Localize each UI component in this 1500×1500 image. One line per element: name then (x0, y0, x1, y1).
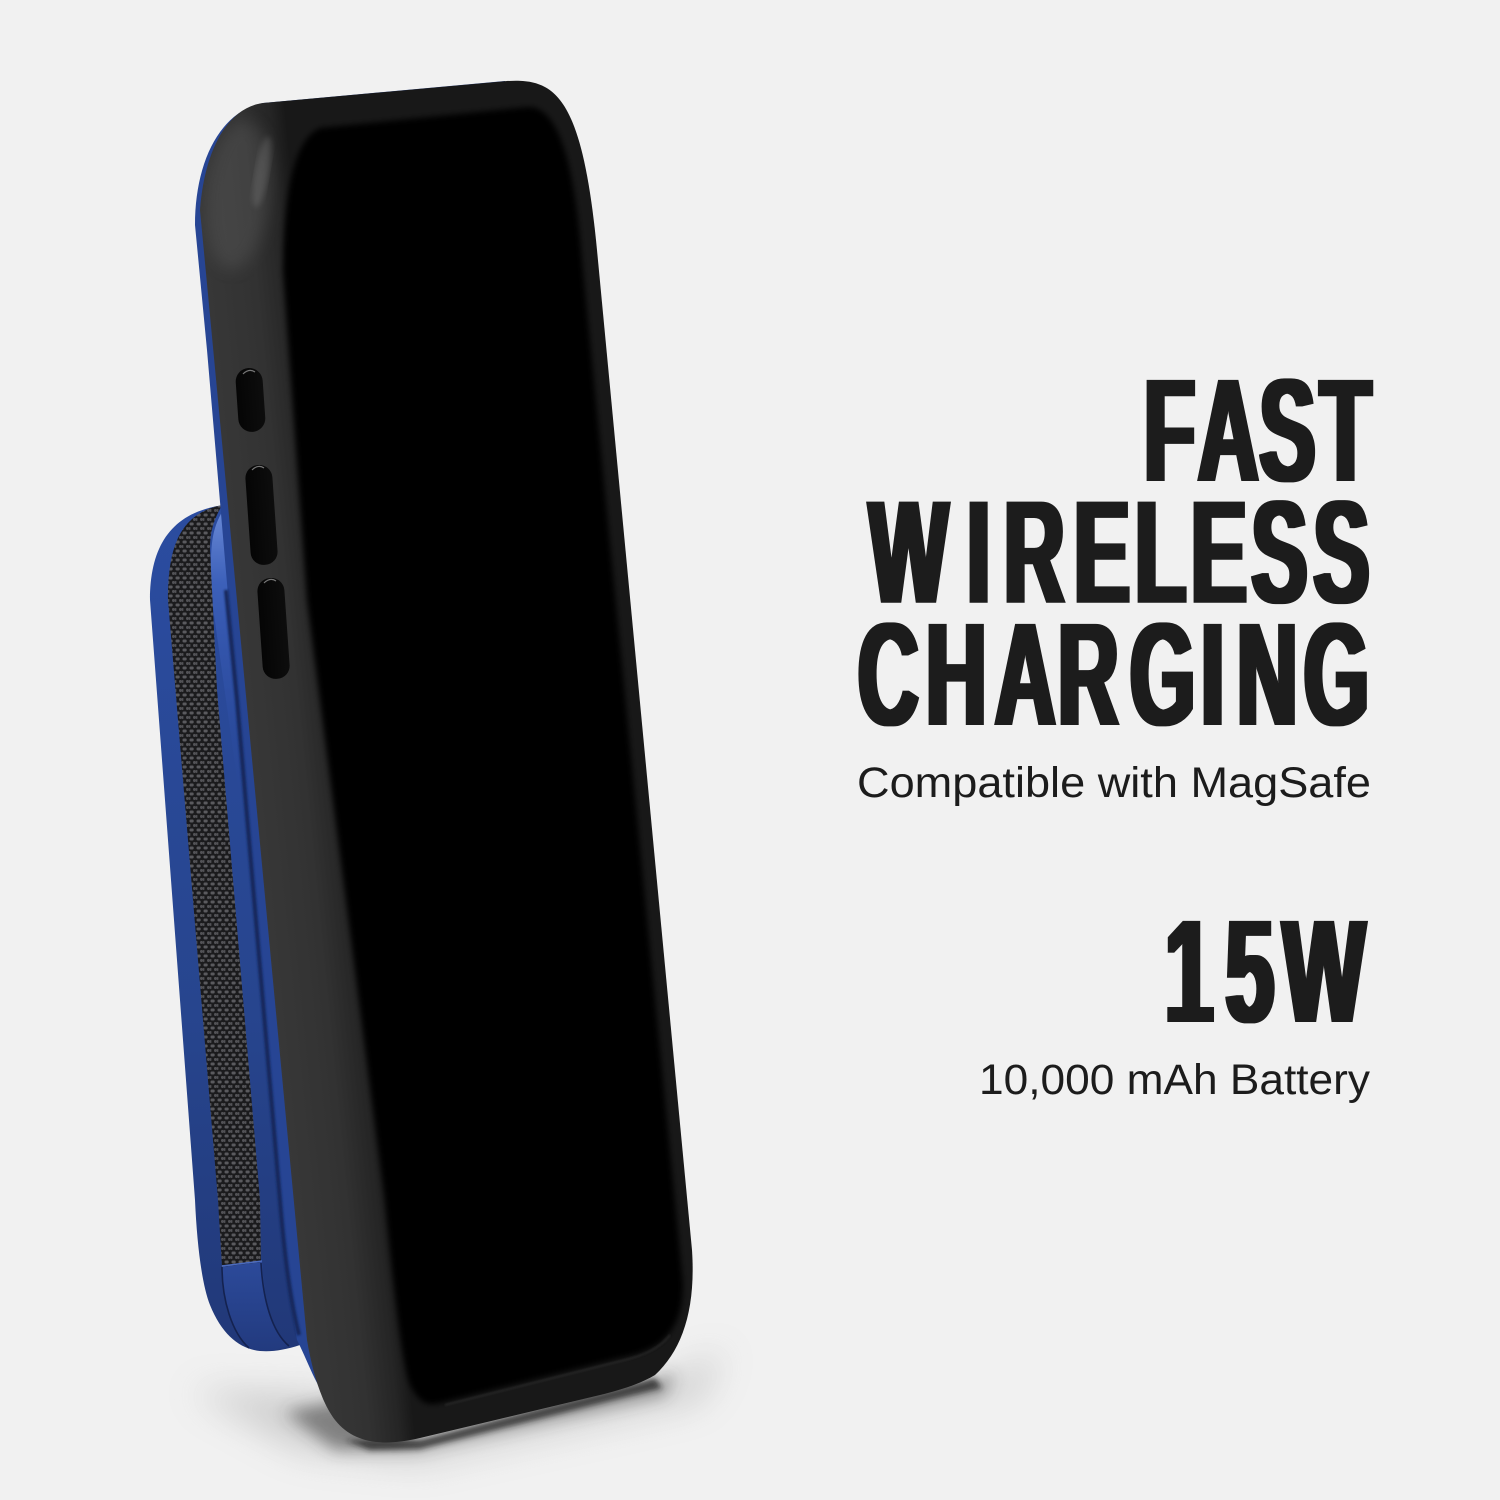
product: phone in case (195, 81, 693, 1442)
volume up button (245, 464, 278, 566)
heading: fast wireless charging (858, 350, 1371, 757)
phone screen (283, 107, 683, 1404)
screen edge glint (445, 1335, 670, 1405)
gap line between power bank and phone (226, 590, 299, 1335)
power bank fabric pad (168, 505, 261, 1267)
floor shadow (190, 1350, 725, 1462)
phone blue edge (195, 81, 520, 1410)
stat caption: battery capacity: 10,000 mAh Battery (979, 1056, 1371, 1104)
heading: fast wireless charging: WIRELESS (869, 471, 1369, 635)
heading: fast wireless charging: FAST (1144, 350, 1371, 513)
case highlight (207, 123, 274, 266)
volume and action buttons (235, 367, 291, 680)
phone case body (200, 81, 693, 1442)
power bank blue shell (150, 505, 330, 1351)
heading: fast wireless charging: CHARGING (858, 594, 1369, 757)
product: magnetic power bank behind phone (150, 505, 330, 1351)
stat: 15W: 15W (1165, 890, 1366, 1054)
power bank light inner strip (211, 512, 262, 800)
subheading: compatible with magsafe: Compatible with MagSafe (857, 759, 1371, 807)
volume down button (257, 577, 291, 680)
action button (235, 367, 266, 433)
power bank foot panel (222, 1262, 287, 1350)
